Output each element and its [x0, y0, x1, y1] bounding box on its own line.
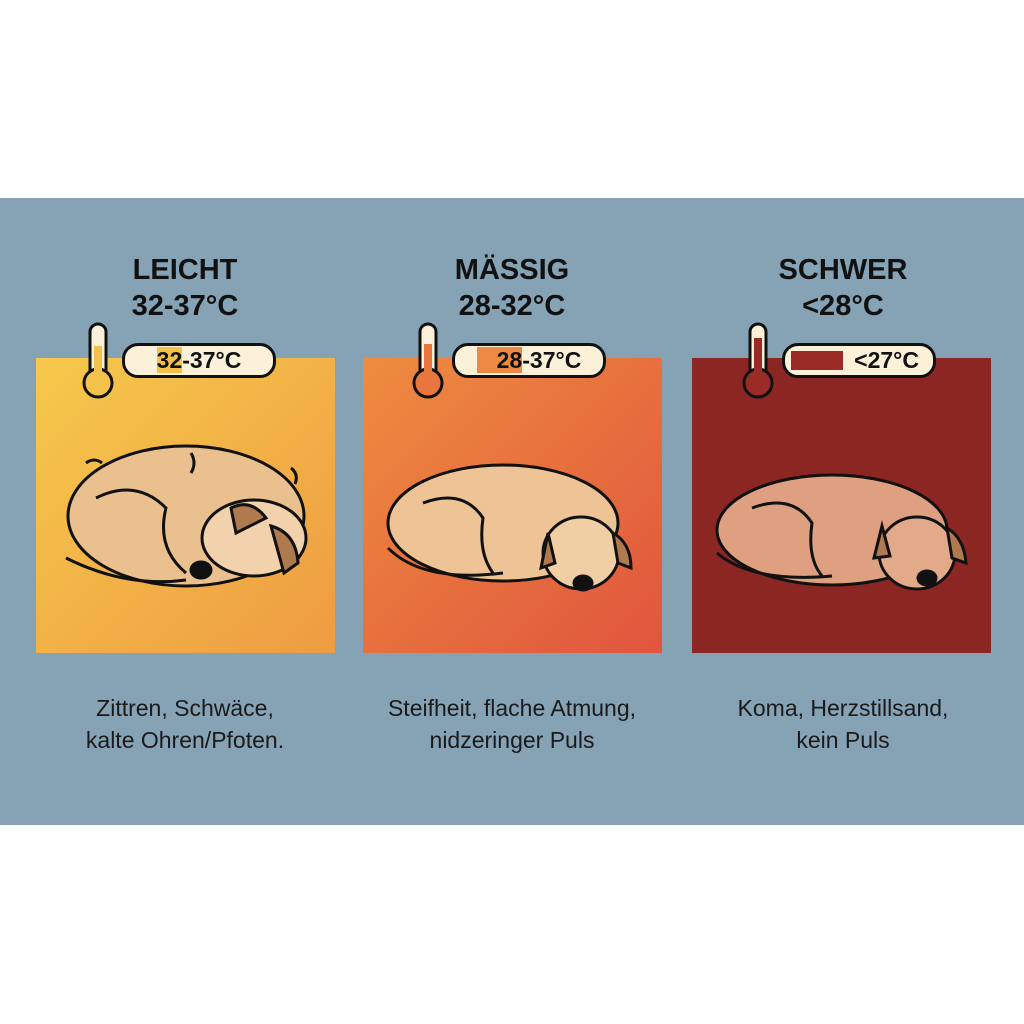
pill: 32-37: 32-37°C	[157, 347, 241, 373]
title: mässig: MÄSSIG	[455, 254, 569, 286]
dog: shivering	[65, 444, 308, 588]
title: schwer: SCHWER	[779, 254, 907, 286]
caption: mässig	[388, 695, 636, 753]
icon: thermometer 3	[742, 322, 774, 398]
title: schwer	[779, 254, 907, 322]
title: mässig: 28-32°C	[459, 290, 565, 322]
icon: thermometer 1	[82, 322, 114, 398]
caption: leicht: kalte Ohren/Pfoten.	[86, 727, 284, 753]
background band	[0, 198, 1024, 825]
caption: schwer: kein Puls	[796, 727, 890, 753]
dog: lethargic	[386, 464, 632, 592]
pill: 32-37	[122, 343, 276, 378]
caption: leicht	[86, 695, 284, 753]
panel: leicht	[36, 358, 335, 653]
caption: leicht: Zittren, Schwäce,	[96, 695, 274, 721]
caption: mässig: Steifheit, flache Atmung,	[388, 695, 636, 721]
pill: <27: <27°C	[854, 347, 919, 373]
pill: 28-37: 28-37°C	[497, 347, 581, 373]
title: leicht: 32-37°C	[132, 290, 238, 322]
dog: unconscious	[716, 474, 968, 590]
caption: schwer	[738, 695, 948, 753]
title: leicht: LEICHT	[133, 254, 237, 286]
title: leicht	[132, 254, 238, 322]
caption: schwer: Koma, Herzstillsand,	[738, 695, 948, 721]
pill: 28-37	[452, 343, 606, 378]
pill: <27	[782, 343, 936, 378]
panel: schwer	[692, 358, 991, 653]
title: mässig	[455, 254, 569, 322]
title: schwer: <28°C	[802, 290, 884, 322]
icon: thermometer 2	[412, 322, 444, 398]
panel: mässig	[363, 358, 662, 653]
caption: mässig: nidzeringer Puls	[430, 727, 594, 753]
